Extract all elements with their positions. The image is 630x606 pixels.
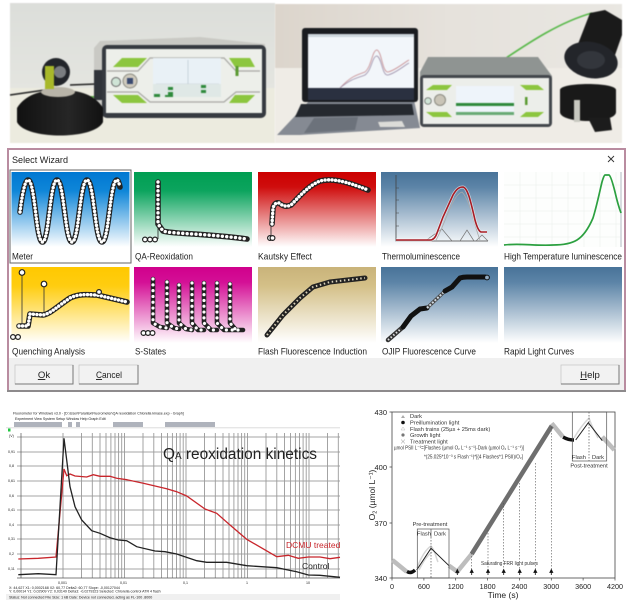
y axis labels: 0,31 (8, 537, 15, 541)
box: post-treatment (572, 412, 607, 461)
y axis title: 2 (372, 511, 378, 514)
plot frame (392, 412, 615, 578)
status bar (6, 594, 340, 600)
formula (394, 446, 524, 460)
box labels: Dark (592, 455, 604, 461)
x axis labels: 0,1 (183, 581, 188, 585)
x axis tick labels: 1800 (480, 582, 496, 591)
readout lines (9, 586, 161, 594)
wizard tile: Thermoluminescence (381, 172, 498, 262)
chart title: QA reoxidation kinetics (163, 446, 317, 463)
y axis tick labels: 370 (374, 519, 387, 528)
wizard tile: Meter (10, 170, 131, 263)
x axis tick labels: 3000 (543, 582, 559, 591)
axis ticks (390, 412, 615, 580)
x axis labels (58, 581, 310, 585)
menu bar: Experiment View System Setup Window Help Graph Edit (15, 417, 106, 421)
readout lines: Y: 0,00014 Y1: 0,02909 Y2: 0,03149 Delta3: -0,0279323 Selected: Chlorella control ATR 4 flash (9, 590, 161, 594)
legend: Preillumination light (410, 420, 460, 426)
box: pre-treatment (417, 529, 449, 578)
toolbar (14, 422, 97, 427)
box labels: Dark (434, 532, 446, 538)
photo: fluorometer with cuvette holder (10, 3, 275, 143)
x axis tick labels: 600 (418, 582, 430, 591)
wizard tile: High Temperature luminescence (504, 172, 622, 262)
series: gray trace segments (392, 423, 614, 572)
legend: Flash trains (25µs + 25ms dark) (410, 427, 490, 433)
legend: Dark (410, 414, 422, 420)
y axis labels: 0,4 (9, 523, 14, 527)
formula: µmol PSII L⁻¹=[Flashes (µmol O₂ L⁻¹ s⁻¹)-Dark (µmol O₂ L⁻¹ s⁻¹)] (394, 446, 524, 452)
y axis labels: 0,8 (9, 464, 14, 468)
wizard tile: Meter: Meter (12, 252, 34, 262)
chart: O2 concentration over time (367, 408, 623, 600)
plot grid (17, 437, 340, 569)
series label: Control: Control (302, 561, 330, 571)
y axis title: O (367, 514, 377, 520)
dotted pulse lines (472, 427, 551, 570)
wizard tile: OJIP Fluorescence Curve: OJIP Fluorescence Curve (382, 346, 476, 358)
y axis tick labels (374, 408, 387, 583)
box labels: Pre-treatment (413, 522, 448, 528)
y axis tick labels: 430 (374, 408, 387, 417)
box labels (413, 455, 608, 538)
y axis labels: 0,6 (9, 494, 14, 498)
wizard tile: Quenching Analysis (11, 267, 130, 358)
readout lines: X: 44,627 X1: 0,0002168 X2: 60,77 Delta2: 60,77 Slope: -0,00127044 (9, 586, 120, 590)
dialog: Select Wizard (7, 148, 626, 392)
window title bar: Fluorometer for Windows v3.0 - [D:\User\Parallax\Fluorometer\QA reoxidation Chlorella kinase.exp - Graph] (13, 412, 184, 416)
button: Ok: Ok (38, 370, 50, 381)
button: Ok (15, 365, 73, 384)
series: dark preillumination blobs (407, 437, 574, 572)
y axis labels: 0,91 (8, 450, 15, 454)
status bar: Status: Not connected File Size: 1 kB Date: Device not connected, acting as FL-100 .8000 (9, 596, 152, 600)
wizard tile: Thermoluminescence: Thermoluminescence (382, 252, 460, 262)
wizard tile: Flash Fluorescence Induction: Flash Fluorescence Induction (258, 346, 367, 358)
curve: DCMU treated (18, 469, 340, 559)
y axis title: (µmol L⁻¹) (367, 469, 377, 511)
y axis tick labels: 400 (374, 463, 387, 472)
x axis labels: 1 (246, 581, 248, 585)
wizard tile: Rapid Light Curves: Rapid Light Curves (504, 346, 574, 358)
arrows: saturating pulses (456, 570, 553, 575)
formula: *(25.025*10⁻³ s Flash⁻¹)*[(4 Flashes*1 PSII)/O₂] (424, 454, 523, 460)
annotation: saturating pulses: Saturating FRR light pulses (481, 561, 538, 567)
y axis tick labels: 340 (374, 574, 387, 583)
wizard tile: QA-Reoxidation: QA-Reoxidation (135, 252, 193, 262)
x axis tick labels: 4200 (607, 582, 623, 591)
y axis labels: (V) (9, 434, 14, 438)
wizard tile: Rapid Light Curves (504, 267, 622, 358)
wizard tile: Flash Fluorescence Induction (258, 267, 376, 358)
wizard tile: QA-Reoxidation (134, 172, 252, 262)
x axis tick labels (390, 582, 623, 591)
y axis labels: 0,61 (8, 479, 15, 483)
x axis tick labels: 2400 (511, 582, 527, 591)
wizard tile: Kautsky Effect (258, 172, 376, 262)
legend: Treatment light (410, 440, 448, 446)
legend (401, 414, 490, 446)
button: Help (561, 365, 619, 384)
button: Help: Help (580, 370, 600, 381)
x axis labels: 0,01 (120, 581, 127, 585)
x axis labels: 10 (306, 581, 310, 585)
curve: Control (18, 438, 340, 577)
series: black fit lines (417, 423, 602, 570)
box labels: Flash (417, 532, 431, 538)
wizard tile: Quenching Analysis: Quenching Analysis (12, 346, 85, 358)
legend: Growth light (410, 433, 441, 439)
series: flash cloud (417, 418, 598, 570)
icon: close button (608, 156, 614, 162)
wizard tile: OJIP Fluorescence Curve (381, 267, 498, 358)
button: Cancel: Cancel (96, 370, 122, 381)
wizard tile: S-States (134, 267, 252, 358)
y axis labels: 0,2 (9, 552, 14, 556)
dialog title: Select Wizard (12, 155, 68, 166)
y axis labels: 0,41 (8, 508, 15, 512)
wizard tile: S-States: S-States (135, 346, 166, 358)
series: growth light trace (472, 426, 552, 554)
x axis tick labels: 0 (390, 582, 394, 591)
x axis tick labels: 1200 (448, 582, 464, 591)
x axis title: Time (s) (488, 590, 519, 600)
x axis tick labels: 3600 (575, 582, 591, 591)
y axis labels (8, 434, 15, 571)
x axis labels: 0,001 (58, 581, 67, 585)
wizard tile: Kautsky Effect: Kautsky Effect (258, 252, 312, 262)
photo: laptop, fluorometer and black sample chamber (275, 4, 622, 143)
y axis labels: 0,11 (8, 567, 15, 571)
box labels: Post-treatment (570, 464, 608, 470)
button: Cancel (79, 365, 138, 384)
box labels: Flash (572, 455, 586, 461)
chart window: QA reoxidation kinetics (6, 408, 341, 606)
series label: DCMU treated: DCMU treated (286, 540, 341, 550)
